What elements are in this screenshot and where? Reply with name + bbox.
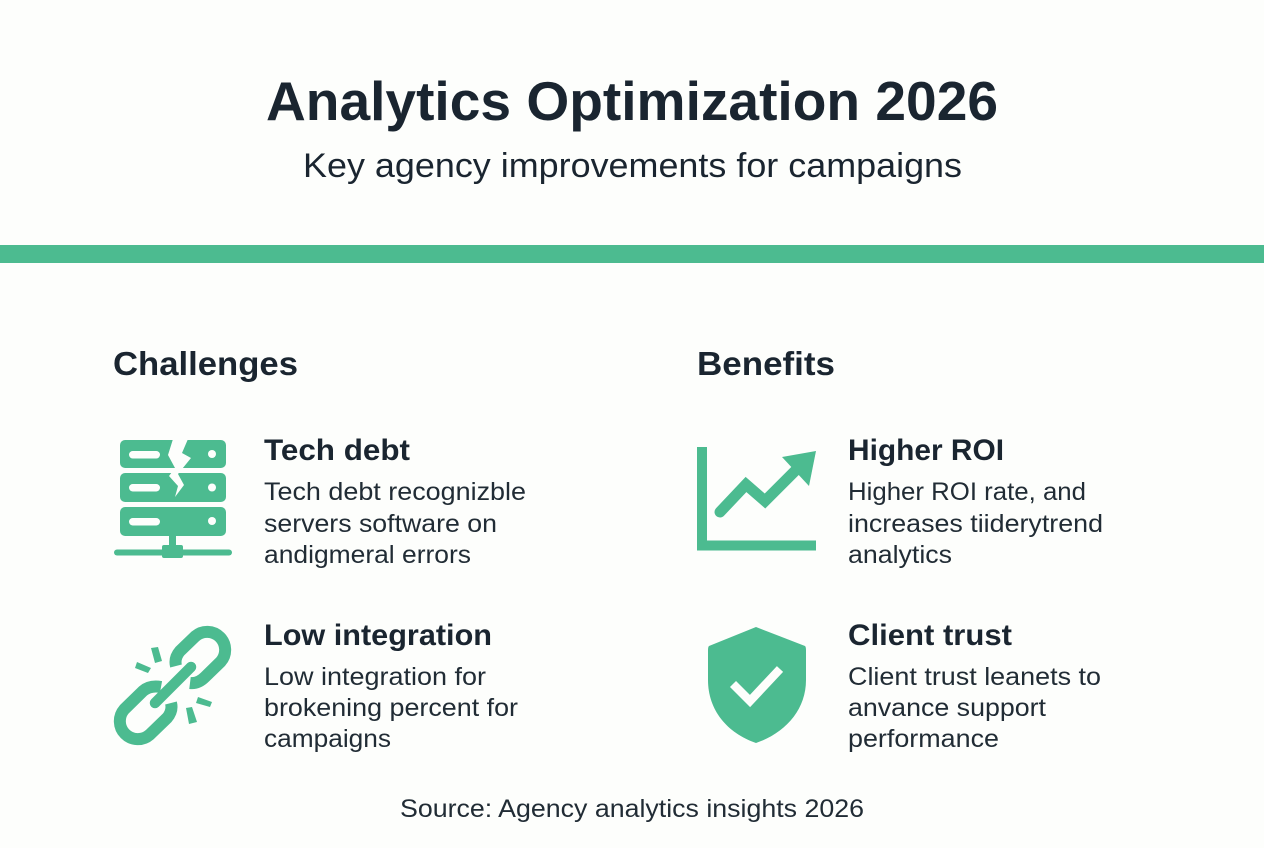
item: client trust: performance: [848, 725, 999, 753]
item: client trust: [848, 619, 1101, 753]
item: higher roi: increases tiiderytrend: [848, 510, 1103, 538]
item: higher roi: analytics: [848, 541, 952, 569]
item: low integration: brokening percent for: [264, 694, 518, 722]
panel: challenges: [113, 345, 526, 753]
item: client trust: Client trust: [848, 619, 1012, 652]
heading: benefits: Benefits: [697, 345, 835, 382]
source note: Source: Agency analytics insights 2026: [400, 795, 864, 823]
icon: broken server: [114, 439, 232, 558]
heading: challenges: Challenges: [113, 345, 298, 382]
item: low integration: [264, 619, 518, 753]
item: higher roi: Higher ROI rate, and: [848, 478, 1086, 506]
item: tech debt: Tech debt: [264, 434, 410, 467]
item: tech debt: andigmeral errors: [264, 541, 471, 569]
icon: broken chain link: [120, 632, 225, 739]
icon: rising line chart: [702, 447, 816, 546]
item: tech debt: servers software on: [264, 510, 497, 538]
item: tech debt: Tech debt recognizble: [264, 478, 526, 506]
panel: benefits: [697, 345, 1103, 753]
item: low integration: campaigns: [264, 725, 391, 753]
icon: shield with check: [708, 627, 806, 743]
item: tech debt: [264, 434, 526, 569]
subtitle: Key agency improvements for campaigns: [303, 147, 962, 185]
item: client trust: anvance support: [848, 694, 1046, 722]
item: low integration: Low integration: [264, 619, 492, 652]
item: higher roi: [848, 434, 1103, 569]
green divider bar: [0, 245, 1264, 263]
item: low integration: Low integration for: [264, 663, 486, 691]
title: Analytics Optimization 2026: [266, 70, 998, 132]
item: higher roi: Higher ROI: [848, 434, 1004, 467]
item: client trust: Client trust leanets to: [848, 663, 1101, 691]
